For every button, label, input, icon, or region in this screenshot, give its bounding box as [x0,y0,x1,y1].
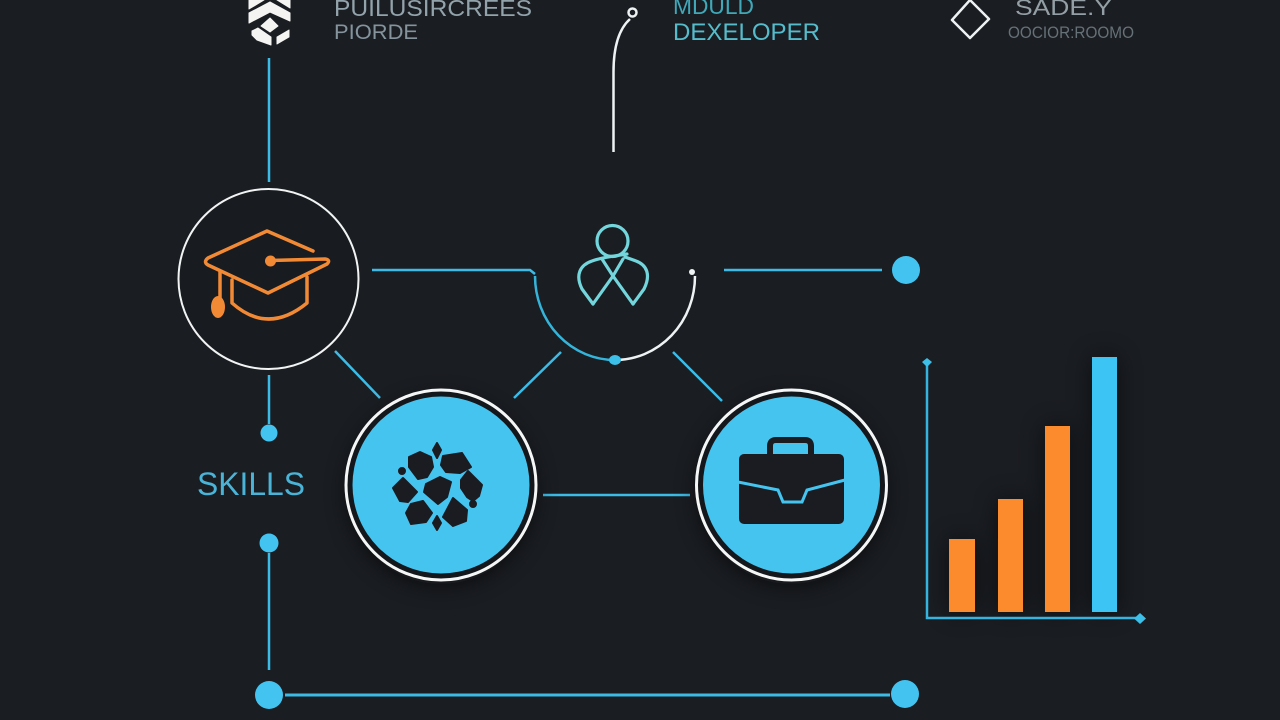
briefcase body [739,454,844,524]
axis end markers [922,358,1146,624]
icon: hook line [614,8,636,152]
axes [927,362,1140,618]
icon: stacked hexagon [249,0,290,45]
bar shadows [949,357,1117,612]
label: skills: SKILLS [197,466,305,502]
node dots [255,256,920,709]
arc end marker [689,269,695,275]
icon: ribbon knot [579,226,647,304]
header item: degrees [249,0,532,45]
bar chart [922,357,1146,624]
icon: briefcase [738,440,845,524]
briefcase flap line [738,480,845,502]
bar 2 [998,499,1023,612]
node: skills [346,390,536,584]
connector lines [269,58,890,695]
arc centre marker [609,355,621,365]
circle outline [178,189,358,369]
arc: white half [615,276,695,360]
circle shadow [699,400,883,584]
circle fill [703,396,880,574]
circle fill [352,396,530,574]
icon: graduation cap [206,231,329,319]
heading: developer: DEXELOPER [673,19,820,46]
bar 1 [949,539,975,612]
node: education [178,189,358,369]
arc: blue half [535,276,615,360]
bar 4 [1092,357,1117,612]
briefcase handle [770,440,811,458]
circle shadow [349,400,533,584]
header item: salary [952,0,1134,42]
circle outline [696,390,886,580]
circle outline [346,390,536,580]
bar 3 [1045,426,1070,612]
node: developer arc [535,226,695,365]
icon: diamond outline [952,0,989,38]
header item: developer [614,0,820,152]
node: experience [696,390,886,584]
subheading: degrees: PIORDE [334,21,418,44]
subheading: salary: OOCIOR:ROOMO [1008,23,1134,42]
icon: hexagonal cluster [393,443,482,530]
